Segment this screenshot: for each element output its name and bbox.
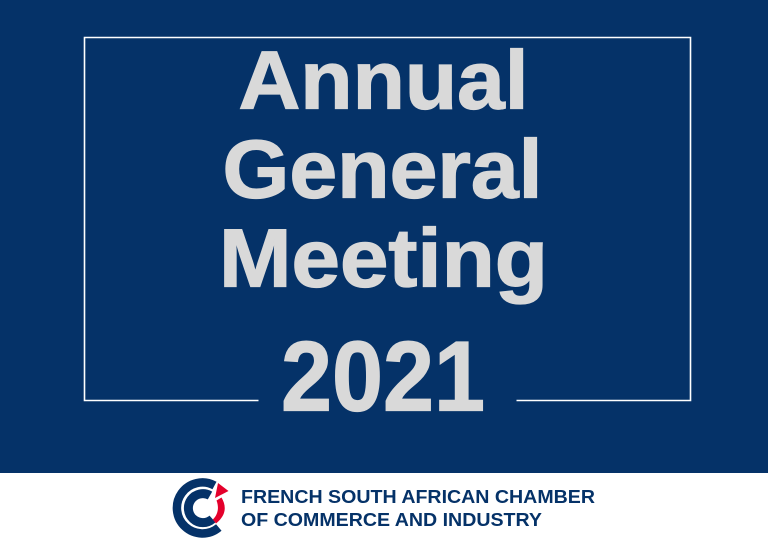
title [219, 34, 548, 304]
white frame with gap around the year [84, 38, 690, 400]
icon: chamber logo [177, 482, 228, 533]
white footer band [0, 473, 768, 543]
organisation name: OF COMMERCE AND INDUSTRY [241, 509, 543, 530]
title: Annual [238, 34, 528, 126]
organisation name [241, 486, 595, 530]
organisation name: FRENCH SOUTH AFRICAN CHAMBER [241, 486, 595, 507]
title: Meeting [219, 212, 548, 304]
title: General [222, 122, 542, 216]
year: 2021 [281, 320, 485, 432]
